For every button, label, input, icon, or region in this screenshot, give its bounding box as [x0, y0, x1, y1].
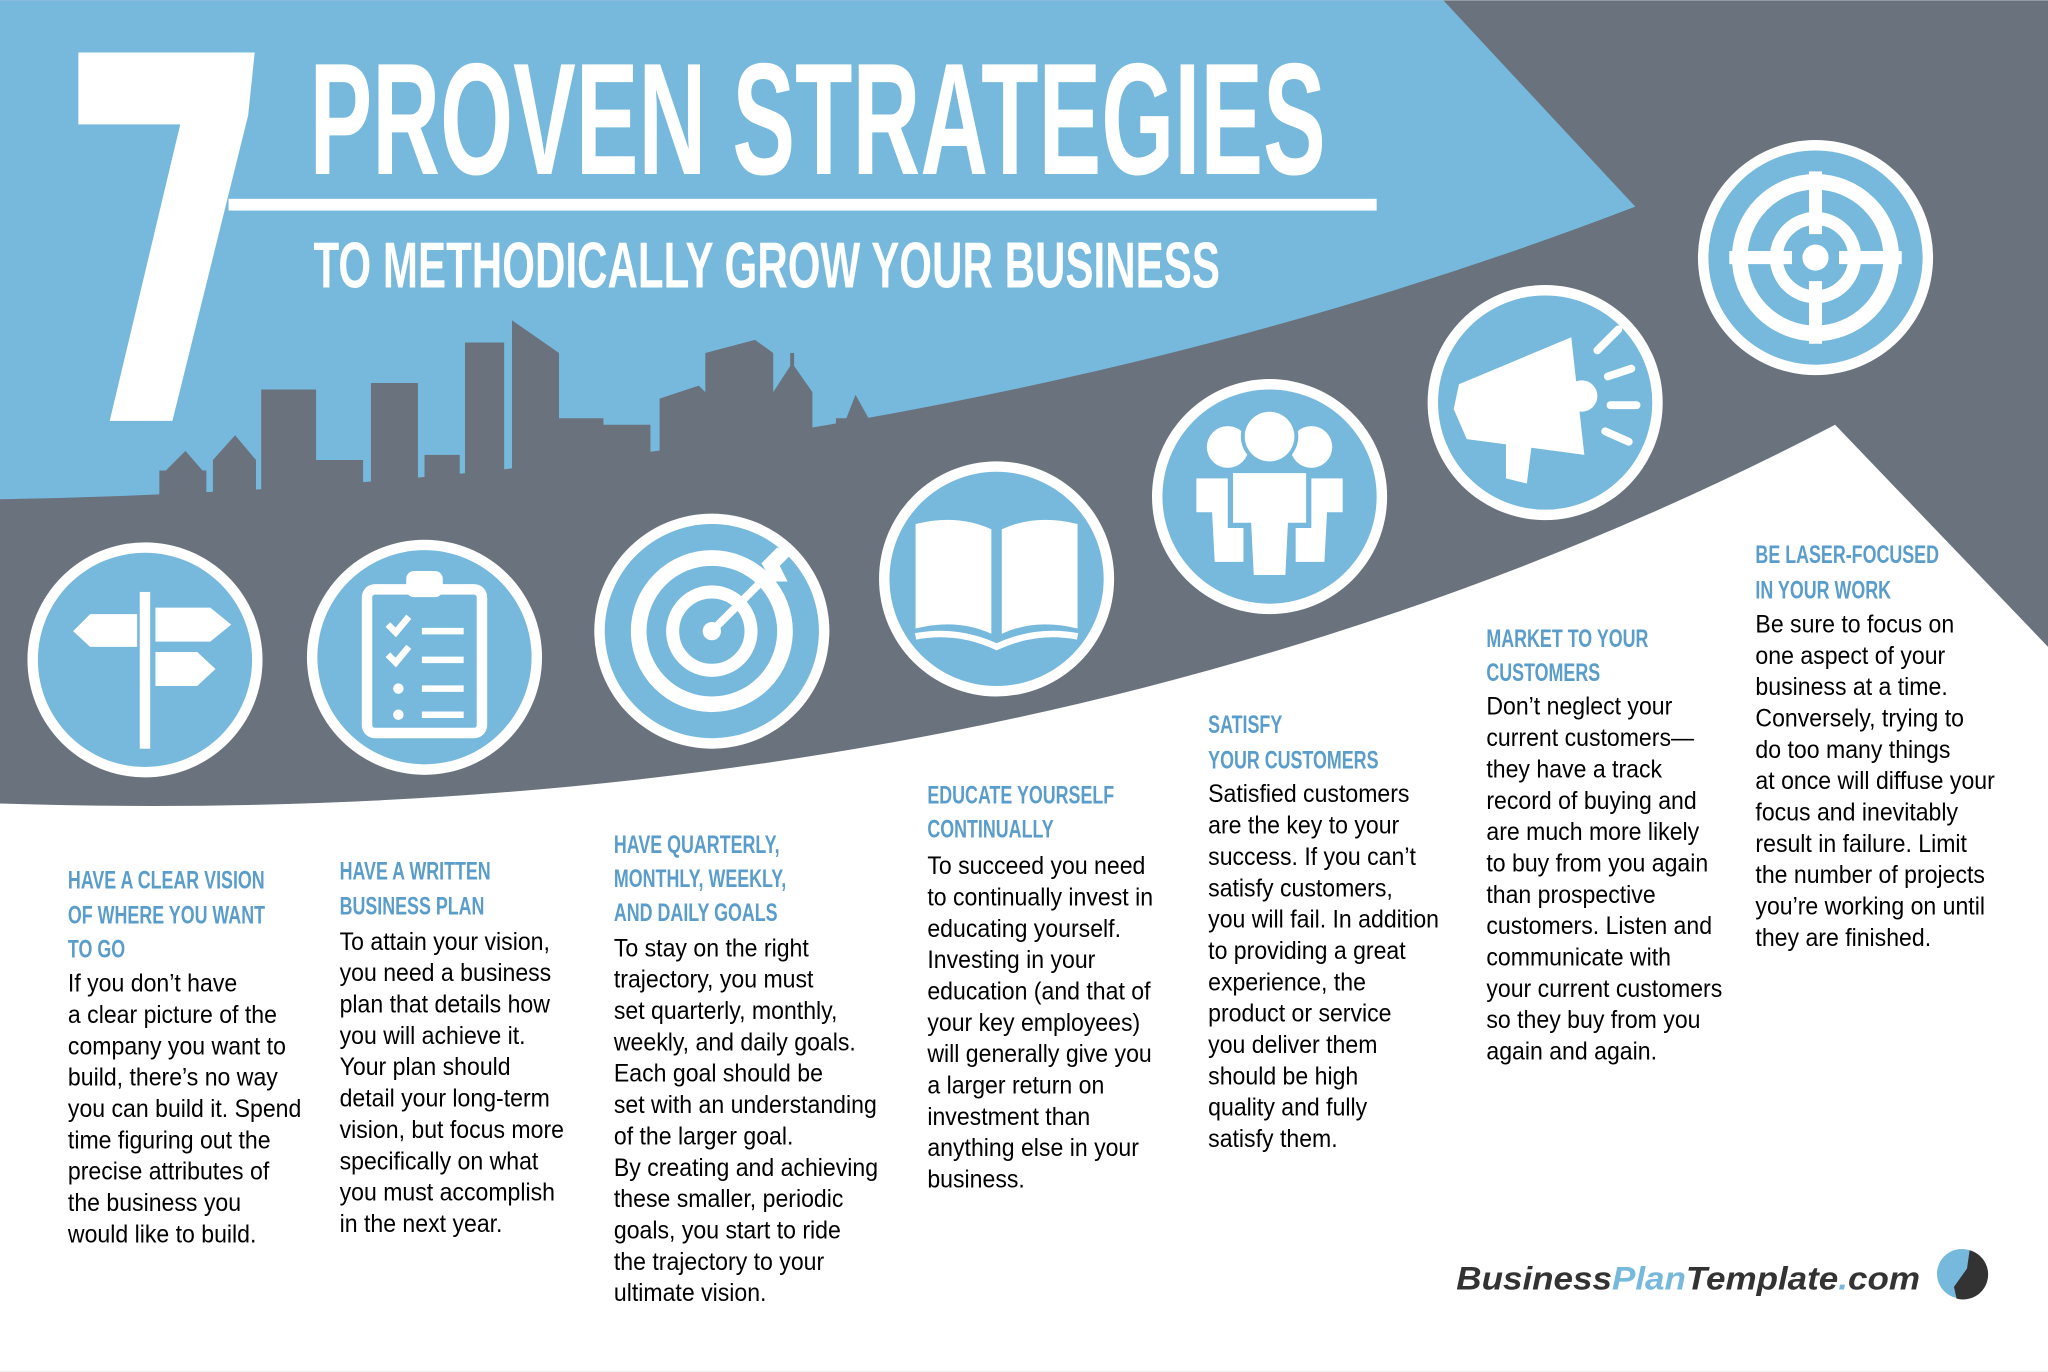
- column 3: AND DAILY GOALS: [614, 898, 778, 927]
- column 7: the number of projects: [1755, 861, 1985, 889]
- column 4: your key employees): [927, 1009, 1140, 1037]
- column 6: Don’t neglect your: [1486, 693, 1672, 721]
- column 3: To stay on the right: [614, 935, 809, 963]
- column 2: [340, 856, 564, 1238]
- column 2: specifically on what: [340, 1148, 539, 1175]
- column 3: set with an understanding: [614, 1091, 877, 1119]
- column 3: ultimate vision.: [614, 1279, 766, 1307]
- column 2: you must accomplish: [340, 1179, 555, 1207]
- column 4: investment than: [927, 1103, 1090, 1131]
- column 2: HAVE A WRITTEN: [340, 856, 491, 885]
- column 5: are the key to your: [1208, 812, 1399, 840]
- column 7: focus and inevitably: [1755, 799, 1958, 827]
- column 4: [926, 781, 1153, 1194]
- icon 2: clipboard: [307, 540, 542, 775]
- column 4: To succeed you need: [927, 852, 1145, 880]
- column 7: at once will diffuse your: [1755, 767, 1995, 795]
- icon 3: target with arrow: [594, 514, 829, 749]
- column 1: the business you: [68, 1189, 241, 1217]
- column 7: you’re working on until: [1755, 893, 1985, 921]
- column 3: Each goal should be: [614, 1060, 823, 1088]
- column 4: educating yourself.: [927, 915, 1121, 943]
- column 1: a clear picture of the: [68, 1001, 277, 1029]
- column 6: record of buying and: [1486, 787, 1697, 815]
- column 5: quality and fully: [1208, 1094, 1367, 1122]
- column 3: these smaller, periodic: [614, 1185, 843, 1213]
- column 5: [1208, 710, 1439, 1153]
- column 6: your current customers: [1486, 975, 1722, 1003]
- column 5: you deliver them: [1208, 1031, 1377, 1059]
- logo icon: pen nib: [1937, 1249, 1988, 1299]
- column 5: experience, the: [1208, 969, 1366, 997]
- column 6: again and again.: [1486, 1038, 1657, 1066]
- column 4: CONTINUALLY: [927, 815, 1054, 843]
- column 7: [1755, 540, 1995, 952]
- column 7: BE LASER-FOCUSED: [1755, 540, 1939, 569]
- big number 7: [78, 53, 255, 421]
- column 6: are much more likely: [1486, 818, 1699, 846]
- icon 6: megaphone: [1428, 285, 1663, 520]
- column 1: HAVE A CLEAR VISION: [68, 865, 265, 894]
- column 1: OF WHERE YOU WANT: [68, 901, 265, 929]
- column 6: CUSTOMERS: [1486, 658, 1600, 687]
- column 2: plan that details how: [340, 991, 551, 1019]
- column 3: the trajectory to your: [614, 1248, 824, 1276]
- column 4: business.: [927, 1166, 1025, 1194]
- column 2: detail your long-term: [340, 1085, 550, 1113]
- column 1: company you want to: [68, 1033, 286, 1061]
- subtitle: TO METHODICALLY GROW YOUR BUSINESS: [313, 229, 1220, 302]
- column 5: should be high: [1208, 1063, 1358, 1091]
- column 1: build, there’s no way: [68, 1064, 278, 1092]
- column 2: To attain your vision,: [340, 928, 550, 956]
- logo: Business PlanTemplate .com: [1456, 1259, 1920, 1296]
- column 1: [67, 865, 301, 1249]
- column 7: Conversely, trying to: [1755, 705, 1964, 733]
- column 7: one aspect of your: [1755, 642, 1945, 670]
- column 4: education (and that of: [927, 978, 1151, 1006]
- column 5: satisfy customers,: [1208, 875, 1393, 902]
- column 6: they have a track: [1486, 756, 1663, 784]
- column 2: Your plan should: [340, 1053, 511, 1081]
- column 7: they are finished.: [1755, 924, 1931, 952]
- column 1: you can build it. Spend: [68, 1095, 301, 1123]
- skyline: [146, 320, 934, 523]
- column 5: success. If you can’t: [1208, 843, 1416, 871]
- logo: [1456, 1249, 1988, 1299]
- column 5: to providing a great: [1208, 937, 1406, 965]
- column 2: you will achieve it.: [340, 1022, 526, 1050]
- column 5: satisfy them.: [1208, 1125, 1338, 1153]
- column 5: product or service: [1208, 1000, 1392, 1028]
- column 2: you need a business: [340, 959, 551, 987]
- column 6: to buy from you again: [1486, 850, 1708, 878]
- column 6: current customers—: [1486, 724, 1694, 752]
- column 6: MARKET TO YOUR: [1486, 624, 1649, 653]
- column 3: set quarterly, monthly,: [614, 997, 837, 1025]
- column 5: Satisfied customers: [1208, 780, 1409, 808]
- column 7: Be sure to focus on: [1755, 611, 1954, 639]
- column 2: in the next year.: [340, 1210, 502, 1238]
- column 3: HAVE QUARTERLY,: [614, 830, 780, 859]
- column 3: goals, you start to ride: [614, 1217, 841, 1245]
- column 7: business at a time.: [1755, 673, 1948, 701]
- column 1: time figuring out the: [68, 1127, 271, 1155]
- column 4: will generally give you: [926, 1040, 1152, 1068]
- column 5: you will fail. In addition: [1208, 906, 1439, 934]
- column 3: trajectory, you must: [614, 966, 814, 994]
- white lower area: [0, 425, 2048, 1372]
- column 2: BUSINESS PLAN: [340, 892, 484, 920]
- column 3: [613, 830, 878, 1307]
- column 4: Investing in your: [927, 946, 1095, 974]
- column 4: to continually invest in: [927, 884, 1153, 912]
- column 4: a larger return on: [927, 1072, 1104, 1100]
- icon 5: team: [1152, 379, 1387, 614]
- icon 4: open book: [879, 461, 1114, 696]
- column 1: If you don’t have: [68, 970, 237, 998]
- column 3: of the larger goal.: [614, 1123, 793, 1151]
- column 1: TO GO: [68, 935, 125, 963]
- column 7: result in failure. Limit: [1755, 830, 1967, 858]
- column 7: do too many things: [1755, 736, 1950, 764]
- column 4: EDUCATE YOURSELF: [927, 781, 1114, 809]
- blue header banner: [0, 0, 1635, 499]
- title rule: [229, 199, 1377, 211]
- column 5: SATISFY: [1208, 710, 1283, 739]
- column 6: so they buy from you: [1486, 1006, 1701, 1034]
- column 3: weekly, and daily goals.: [613, 1029, 856, 1057]
- column 6: than prospective: [1486, 881, 1656, 909]
- column 5: YOUR CUSTOMERS: [1208, 745, 1378, 774]
- column 3: By creating and achieving: [614, 1154, 878, 1182]
- column 1: would like to build.: [67, 1221, 256, 1249]
- column 2: vision, but focus more: [340, 1116, 564, 1144]
- icon 1: signpost: [27, 542, 263, 777]
- column 7: IN YOUR WORK: [1755, 576, 1891, 604]
- column 4: anything else in your: [927, 1134, 1139, 1162]
- column 6: [1486, 624, 1722, 1066]
- icon 7: crosshair: [1698, 140, 1933, 375]
- column 6: customers. Listen and: [1486, 912, 1712, 940]
- title: PROVEN STRATEGIES: [310, 30, 1326, 208]
- column 3: MONTHLY, WEEKLY,: [614, 864, 786, 893]
- column 1: precise attributes of: [68, 1158, 270, 1186]
- column 6: communicate with: [1486, 944, 1671, 972]
